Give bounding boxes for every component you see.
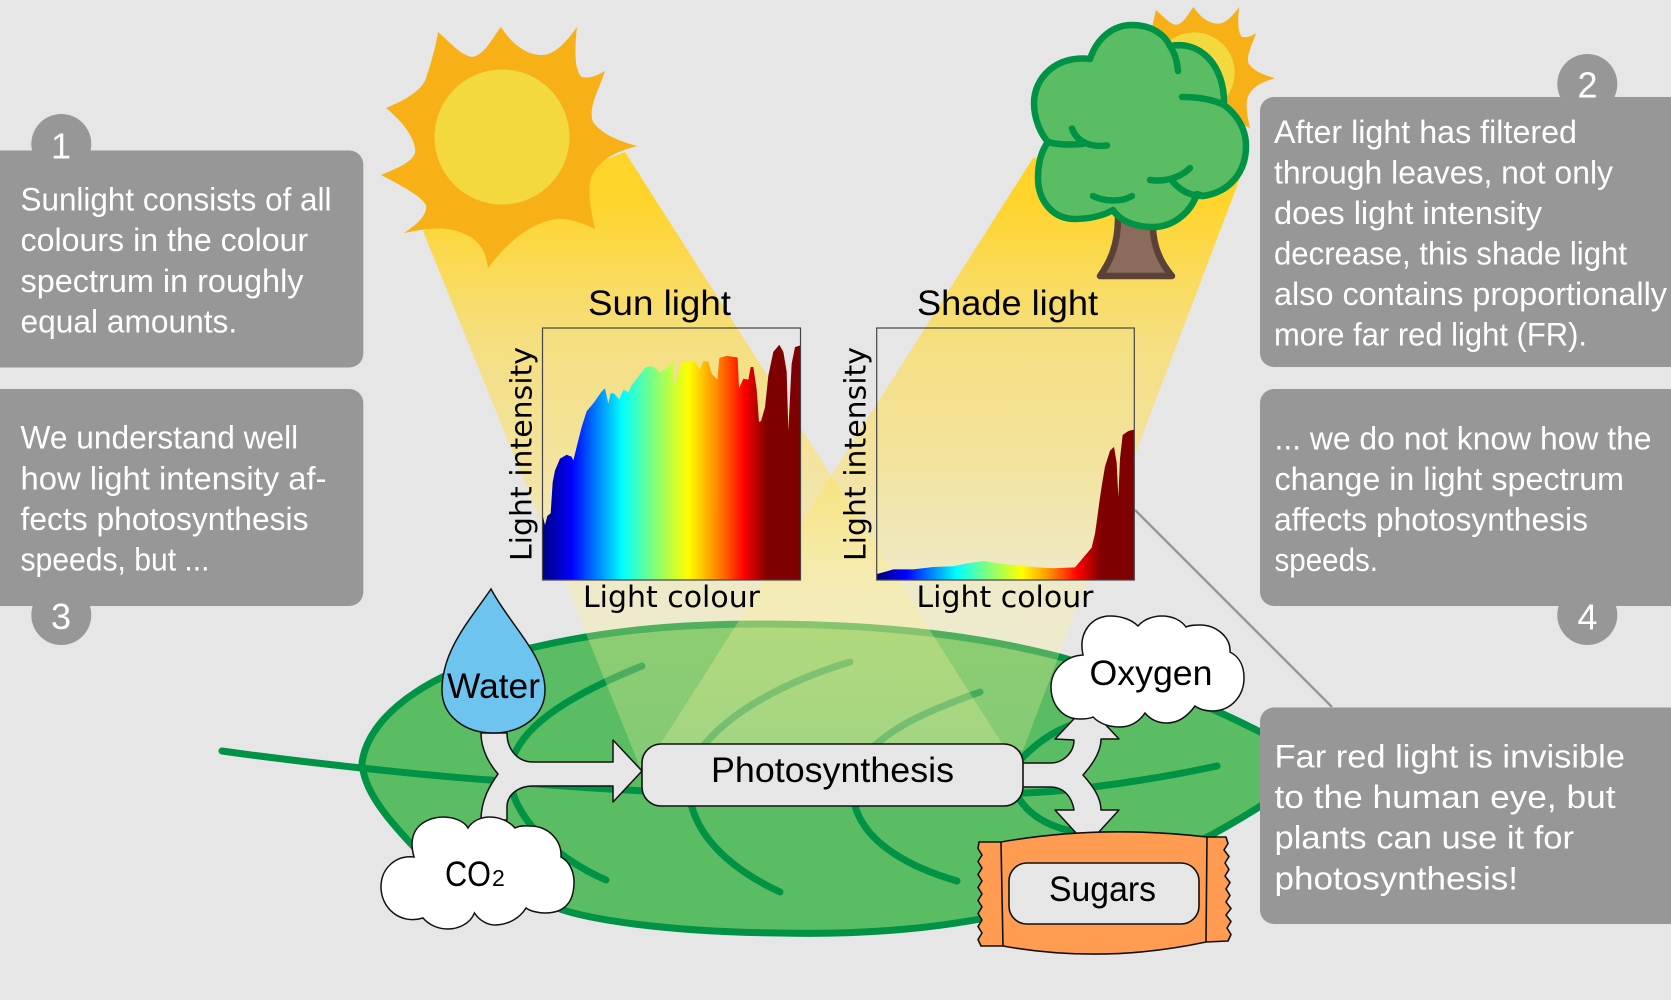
panel 2: shade light <box>1260 54 1671 367</box>
panel 2: shade light: does light intensity <box>1274 195 1542 231</box>
icon: sugar packet <box>978 832 1231 954</box>
shade chart y axis label: Light intensity <box>839 347 873 561</box>
panel 2: shade light: 2 <box>1577 64 1598 106</box>
cloud: oxygen: Oxygen <box>1090 654 1212 693</box>
panel 4: light spectrum: ... we do not know how the <box>1274 420 1652 456</box>
cloud: CO2: CO <box>445 855 491 894</box>
panel 2: shade light: through leaves, not only <box>1274 154 1613 190</box>
chart title: shade light: Shade light <box>917 284 1098 323</box>
cloud: CO2: 2 <box>492 865 505 891</box>
panel 3: light intensity: speeds, but ... <box>20 541 210 577</box>
icon: sun <box>381 27 637 268</box>
sun chart frame <box>542 328 800 580</box>
icon: sun behind tree <box>1122 7 1275 152</box>
panel 4: light spectrum: change in light spectrum <box>1274 461 1624 497</box>
sun chart y axis label: Light intensity <box>505 347 539 561</box>
panel: far red light callout: Far red light is invisible <box>1274 739 1625 775</box>
panel 4: light spectrum: speeds. <box>1274 542 1378 578</box>
callout connector line <box>1135 510 1332 707</box>
panel: far red light callout: plants can use it for <box>1274 820 1574 856</box>
icon: tree <box>1034 25 1246 276</box>
panel 2: shade light: After light has filtered <box>1274 114 1577 150</box>
panel 3: light intensity: 3 <box>51 596 71 637</box>
panel 2: shade light: decrease, this shade light <box>1274 235 1627 271</box>
panel: far red light callout: photosynthesis! <box>1274 860 1518 896</box>
process box: photosynthesis: Photosynthesis <box>711 751 954 790</box>
light beam: sun to leaf <box>423 152 1003 767</box>
panel 3: light intensity: how light intensity af- <box>20 460 326 496</box>
icon: water drop: Water <box>447 667 540 706</box>
panel 2: shade light: also contains proportionally <box>1274 276 1667 312</box>
sun chart x axis label: Light colour <box>583 580 760 614</box>
panel 4: light spectrum: 4 <box>1577 596 1598 637</box>
panel 1: sunlight: 1 <box>51 126 71 166</box>
panel 3: light intensity: We understand well <box>20 420 298 456</box>
leaf <box>222 624 1320 933</box>
panel 1: sunlight: Sunlight consists of all <box>20 181 332 217</box>
panel 1: sunlight: colours in the colour <box>20 222 309 258</box>
panel 1: sunlight: spectrum in roughly <box>20 263 304 299</box>
panel 1: sunlight <box>0 114 363 368</box>
arrow: water and CO2 into photosynthesis <box>481 733 642 820</box>
shade spectrum area <box>877 430 1134 580</box>
panel 4: light spectrum <box>1260 389 1671 645</box>
panel: far red light callout: to the human eye, but <box>1274 779 1616 815</box>
process box: photosynthesis <box>642 744 1023 806</box>
cloud: CO2 <box>381 817 574 929</box>
shade chart frame <box>877 328 1134 580</box>
light beam: filtered light below tree <box>660 158 1245 750</box>
panel 1: sunlight: equal amounts. <box>20 304 237 340</box>
shade chart x axis label: Light colour <box>916 580 1094 614</box>
cloud: oxygen <box>1051 616 1244 727</box>
sun spectrum area <box>542 345 801 580</box>
chart: shade light spectrum <box>839 284 1134 614</box>
panel 3: light intensity: fects photosynthesis <box>20 501 308 537</box>
panel 2: shade light: more far red light (FR). <box>1274 316 1587 352</box>
chart: sun light spectrum <box>505 284 801 614</box>
panel: far red light callout <box>1260 708 1671 924</box>
panel 3: light intensity <box>0 389 363 645</box>
panel 4: light spectrum: affects photosynthesis <box>1274 501 1588 537</box>
arrow: photosynthesis to oxygen and sugars <box>1022 705 1119 845</box>
chart title: sun light: Sun light <box>588 284 731 323</box>
icon: sugar packet: Sugars <box>1049 870 1156 909</box>
icon: water drop <box>442 589 545 733</box>
